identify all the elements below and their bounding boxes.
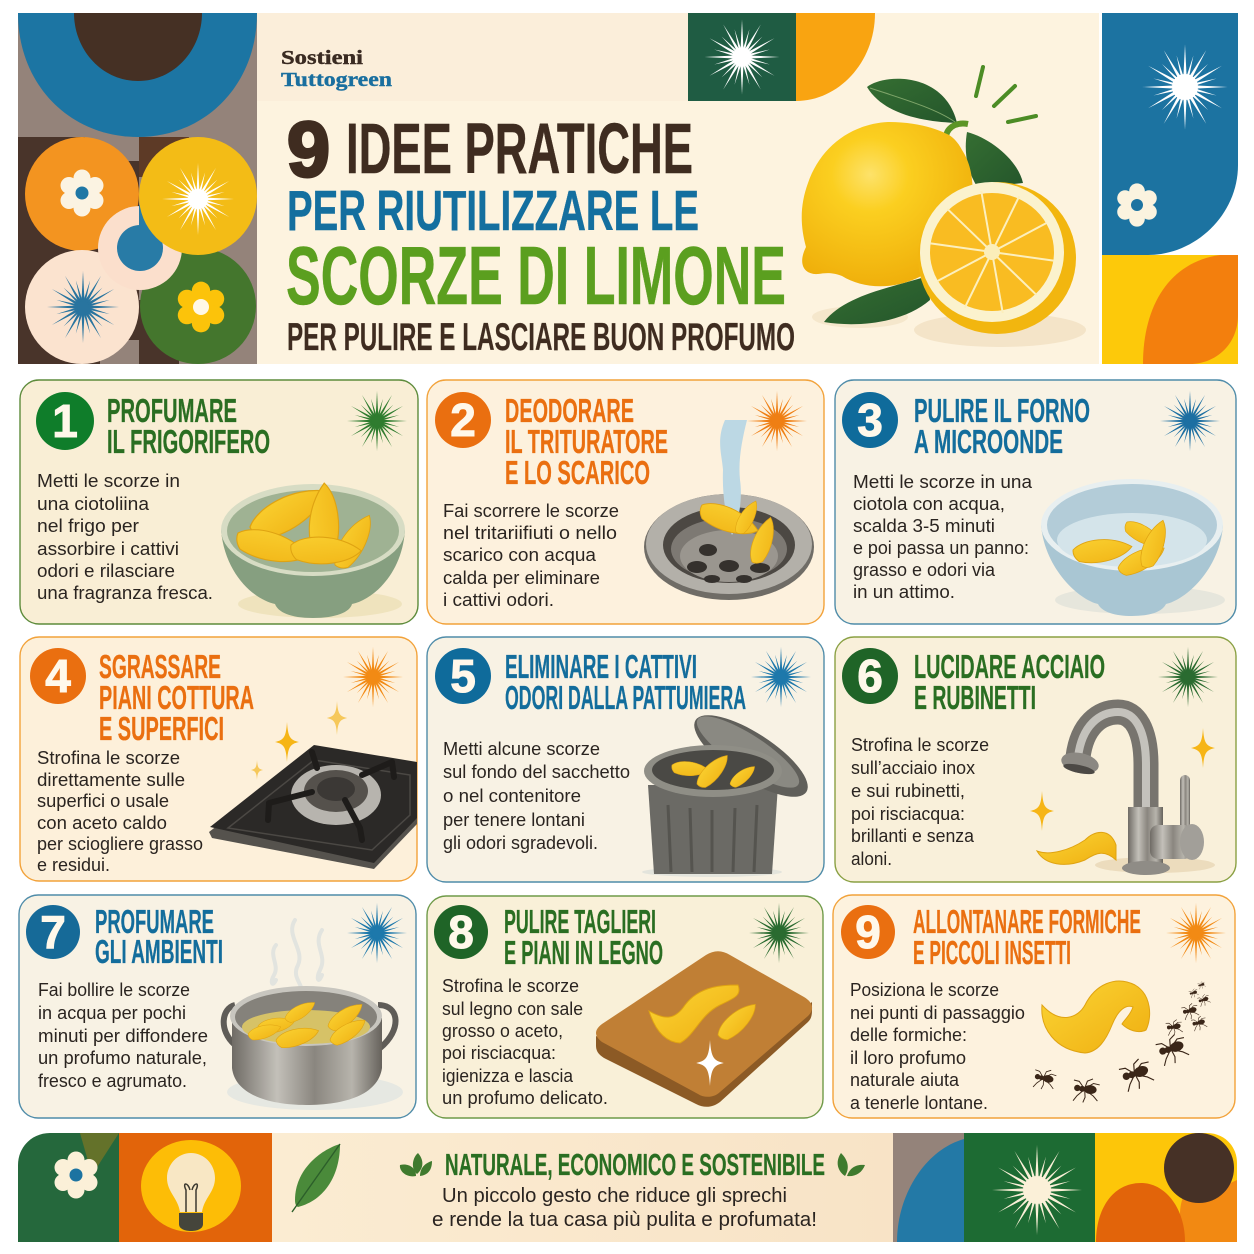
text: Posiziona le scorze [850,980,999,1000]
panel: card 9 [833,895,1235,1118]
brand label: Tuttogreen [281,69,392,91]
illustration: trash bin [642,701,819,877]
number badge 7 [26,905,80,959]
title: IDEE PRATICHE [346,110,693,189]
number badge 7: 7 [40,906,66,958]
heading: PULIRE TAGLIERI [504,903,656,940]
text: in acqua per pochi [38,1003,186,1023]
text: odori e rilasciare [37,561,175,581]
left tiles [18,1133,272,1242]
panel: card 8 [427,896,823,1118]
text: aloni. [851,849,892,869]
footer heading with leaf icons: NATURALE, ECONOMICO E SOSTENIBILE [445,1147,825,1182]
icon: burst [1158,647,1218,707]
text: ciotola con acqua, [853,494,1005,514]
heading: PULIRE IL FORNO [914,392,1090,429]
illustration: lemons [802,67,1086,347]
text: o nel contenitore [443,786,581,806]
brand label: Sostieni [281,47,364,69]
text [851,735,989,869]
number badge 4 [30,648,86,704]
heading: PROFUMARE [95,903,214,940]
icon: burst [749,903,809,963]
text: Strofina le scorze [37,748,180,768]
number badge 3 [842,392,898,448]
text: minuti per diffondere [38,1026,208,1046]
text: una ciotoliina [37,494,150,514]
heading: A MICROONDE [914,423,1063,460]
heading: IL FRIGORIFERO [107,423,270,460]
text: un profumo naturale, [38,1048,207,1068]
icon: yellow sunburst [162,163,234,235]
text: con aceto caldo [37,813,167,833]
heading [107,392,270,460]
text: un profumo delicato. [442,1088,608,1108]
heading [505,392,668,491]
panel: card 2 [427,380,824,624]
text: brillanti e senza [851,826,975,846]
text: per tenere lontani [443,810,585,830]
icon: burst [347,391,407,451]
number badge 8: 8 [448,906,474,958]
heading [504,903,663,971]
text: sul fondo del sacchetto [443,762,630,782]
text: poi risciacqua: [442,1043,556,1063]
text: grosso o aceto, [442,1021,563,1041]
panel: card 6 [835,637,1236,882]
text: e poi passa un panno: [853,538,1029,558]
text: grasso e odori via [853,560,996,580]
sparkles [251,701,347,780]
icon: flower [54,1152,98,1198]
icon: burst [1160,391,1220,451]
text: i cattivi odori. [443,590,554,610]
number badge 9: 9 [855,906,881,958]
heading [505,648,746,716]
panel: footer band [18,1133,1237,1242]
number badge 4: 4 [45,650,71,702]
heading: PIANI COTTURA [99,679,254,716]
sparkle [696,1040,724,1086]
text: Strofina le scorze [851,735,989,755]
text: scarico con acqua [443,545,597,565]
title: PER RIUTILIZZARE LE [287,179,699,243]
text [38,980,208,1091]
text: Fai bollire le scorze [38,980,190,1000]
heading: E RUBINETTI [914,679,1036,716]
text [37,748,203,875]
text [442,976,608,1108]
icon: light bulb [141,1140,241,1232]
illustration: steaming pot [224,920,403,1110]
number badge 6 [842,648,898,704]
number badge 2: 2 [450,394,476,446]
text: Metti alcune scorze [443,739,600,759]
illustration: sink drain with peels [644,420,814,600]
right tiles [893,1133,1237,1242]
text: nei punti di passaggio [850,1003,1025,1023]
text: sull’acciaio inox [851,758,975,778]
text [443,739,630,853]
illustration: gas hob [209,745,417,869]
text: Strofina le scorze [442,976,579,996]
illustration: green bowl with peels [221,482,405,618]
icon: burst [751,647,811,707]
text: e residui. [37,855,110,875]
number badge 1 [36,392,94,450]
heading: E LO SCARICO [505,454,650,491]
illustration: glass bowl with water and peels [1041,479,1225,616]
top geometric tiles [688,13,875,101]
text: Metti le scorze in una [853,472,1033,492]
title: PER PULIRE E LASCIARE BUON PROFUMO [287,316,795,359]
heading: DEODORARE [505,392,634,429]
heading [914,648,1105,716]
icon: burst [1166,903,1226,963]
heading: LUCIDARE ACCIAIO [914,648,1105,685]
heading: GLI AMBIENTI [95,933,223,970]
icon: yellow flower [178,282,224,332]
title: SCORZE DI LIMONE [286,229,786,322]
panel: card 3 [835,380,1236,624]
heading [913,903,1141,971]
text: gli odori sgradevoli. [443,833,598,853]
footer text: e rende la tua casa più pulita e profumata! [432,1209,817,1231]
illustration: peel and ants [1032,981,1211,1104]
footer heading with leaf icons [400,1147,865,1182]
number badge 8 [434,905,488,959]
text: assorbire i cattivi [37,539,179,559]
header background [257,13,1099,364]
text: igienizza e lascia [442,1066,574,1086]
sparkles [1030,728,1215,831]
text: superfici o usale [37,791,169,811]
icon: burst [343,647,403,707]
text: e sui rubinetti, [851,781,965,801]
panel: card 5 [427,637,824,882]
heading: E PICCOLI INSETTI [913,934,1071,971]
text: scalda 3-5 minuti [853,516,995,536]
icon: green leaf [292,1144,340,1212]
text: Metti le scorze in [37,471,180,491]
text [37,471,213,603]
illustration: faucet and peel [1030,712,1215,875]
text: calda per eliminare [443,568,600,588]
panel: card 7 [19,895,416,1118]
icon: white flower [60,170,104,216]
icon: burst [747,391,807,451]
text: nel frigo per [37,516,139,536]
text: per sciogliere grasso [37,834,203,854]
heading: ELIMINARE I CATTIVI [505,648,697,685]
text [853,472,1033,602]
icon: flower [1117,183,1157,227]
title: 9 [287,105,330,193]
number badge 5 [435,648,491,704]
illustration: cutting board [596,951,812,1107]
text [850,980,1025,1113]
text: direttamente sulle [37,770,185,790]
icon: blue sunburst [47,271,119,343]
text: in un attimo. [853,582,955,602]
panel: right geometric mosaic [1102,13,1238,364]
text: sul legno con sale [442,999,583,1019]
number badge 2 [435,392,491,448]
panel: left geometric mosaic [18,13,257,364]
panel: card 1 [20,380,418,624]
panel: card 4 [20,637,417,881]
panel: header [18,13,1238,364]
text: naturale aiuta [850,1070,960,1090]
number badge 6: 6 [857,650,883,702]
number badge 5: 5 [450,650,476,702]
text: una fragranza fresca. [37,583,213,603]
heading: SGRASSARE [99,648,221,685]
text: delle formiche: [850,1025,967,1045]
text: poi risciacqua: [851,804,965,824]
text: fresco e agrumato. [38,1071,187,1091]
heading: IL TRITURATORE [505,423,668,460]
heading: PROFUMARE [107,392,237,429]
text: a tenerle lontane. [850,1093,988,1113]
number badge 3: 3 [857,394,883,446]
heading [95,903,223,970]
text [443,501,619,610]
heading: ODORI DALLA PATTUMIERA [505,679,746,716]
text: Fai scorrere le scorze [443,501,619,521]
number badge 1: 1 [52,395,78,447]
brand label [281,47,392,91]
ants [1032,981,1211,1104]
heading [914,392,1090,460]
heading: E SUPERFICI [99,710,224,747]
number badge 9 [841,905,895,959]
title [286,105,795,359]
footer text: Un piccolo gesto che riduce gli sprechi [442,1185,787,1207]
footer text [432,1185,817,1231]
text: il loro profumo [850,1048,966,1068]
icon: burst [347,903,407,963]
text: nel tritariifiuti o nello [443,523,617,543]
heading: E PIANI IN LEGNO [504,934,663,971]
heading [99,648,254,747]
